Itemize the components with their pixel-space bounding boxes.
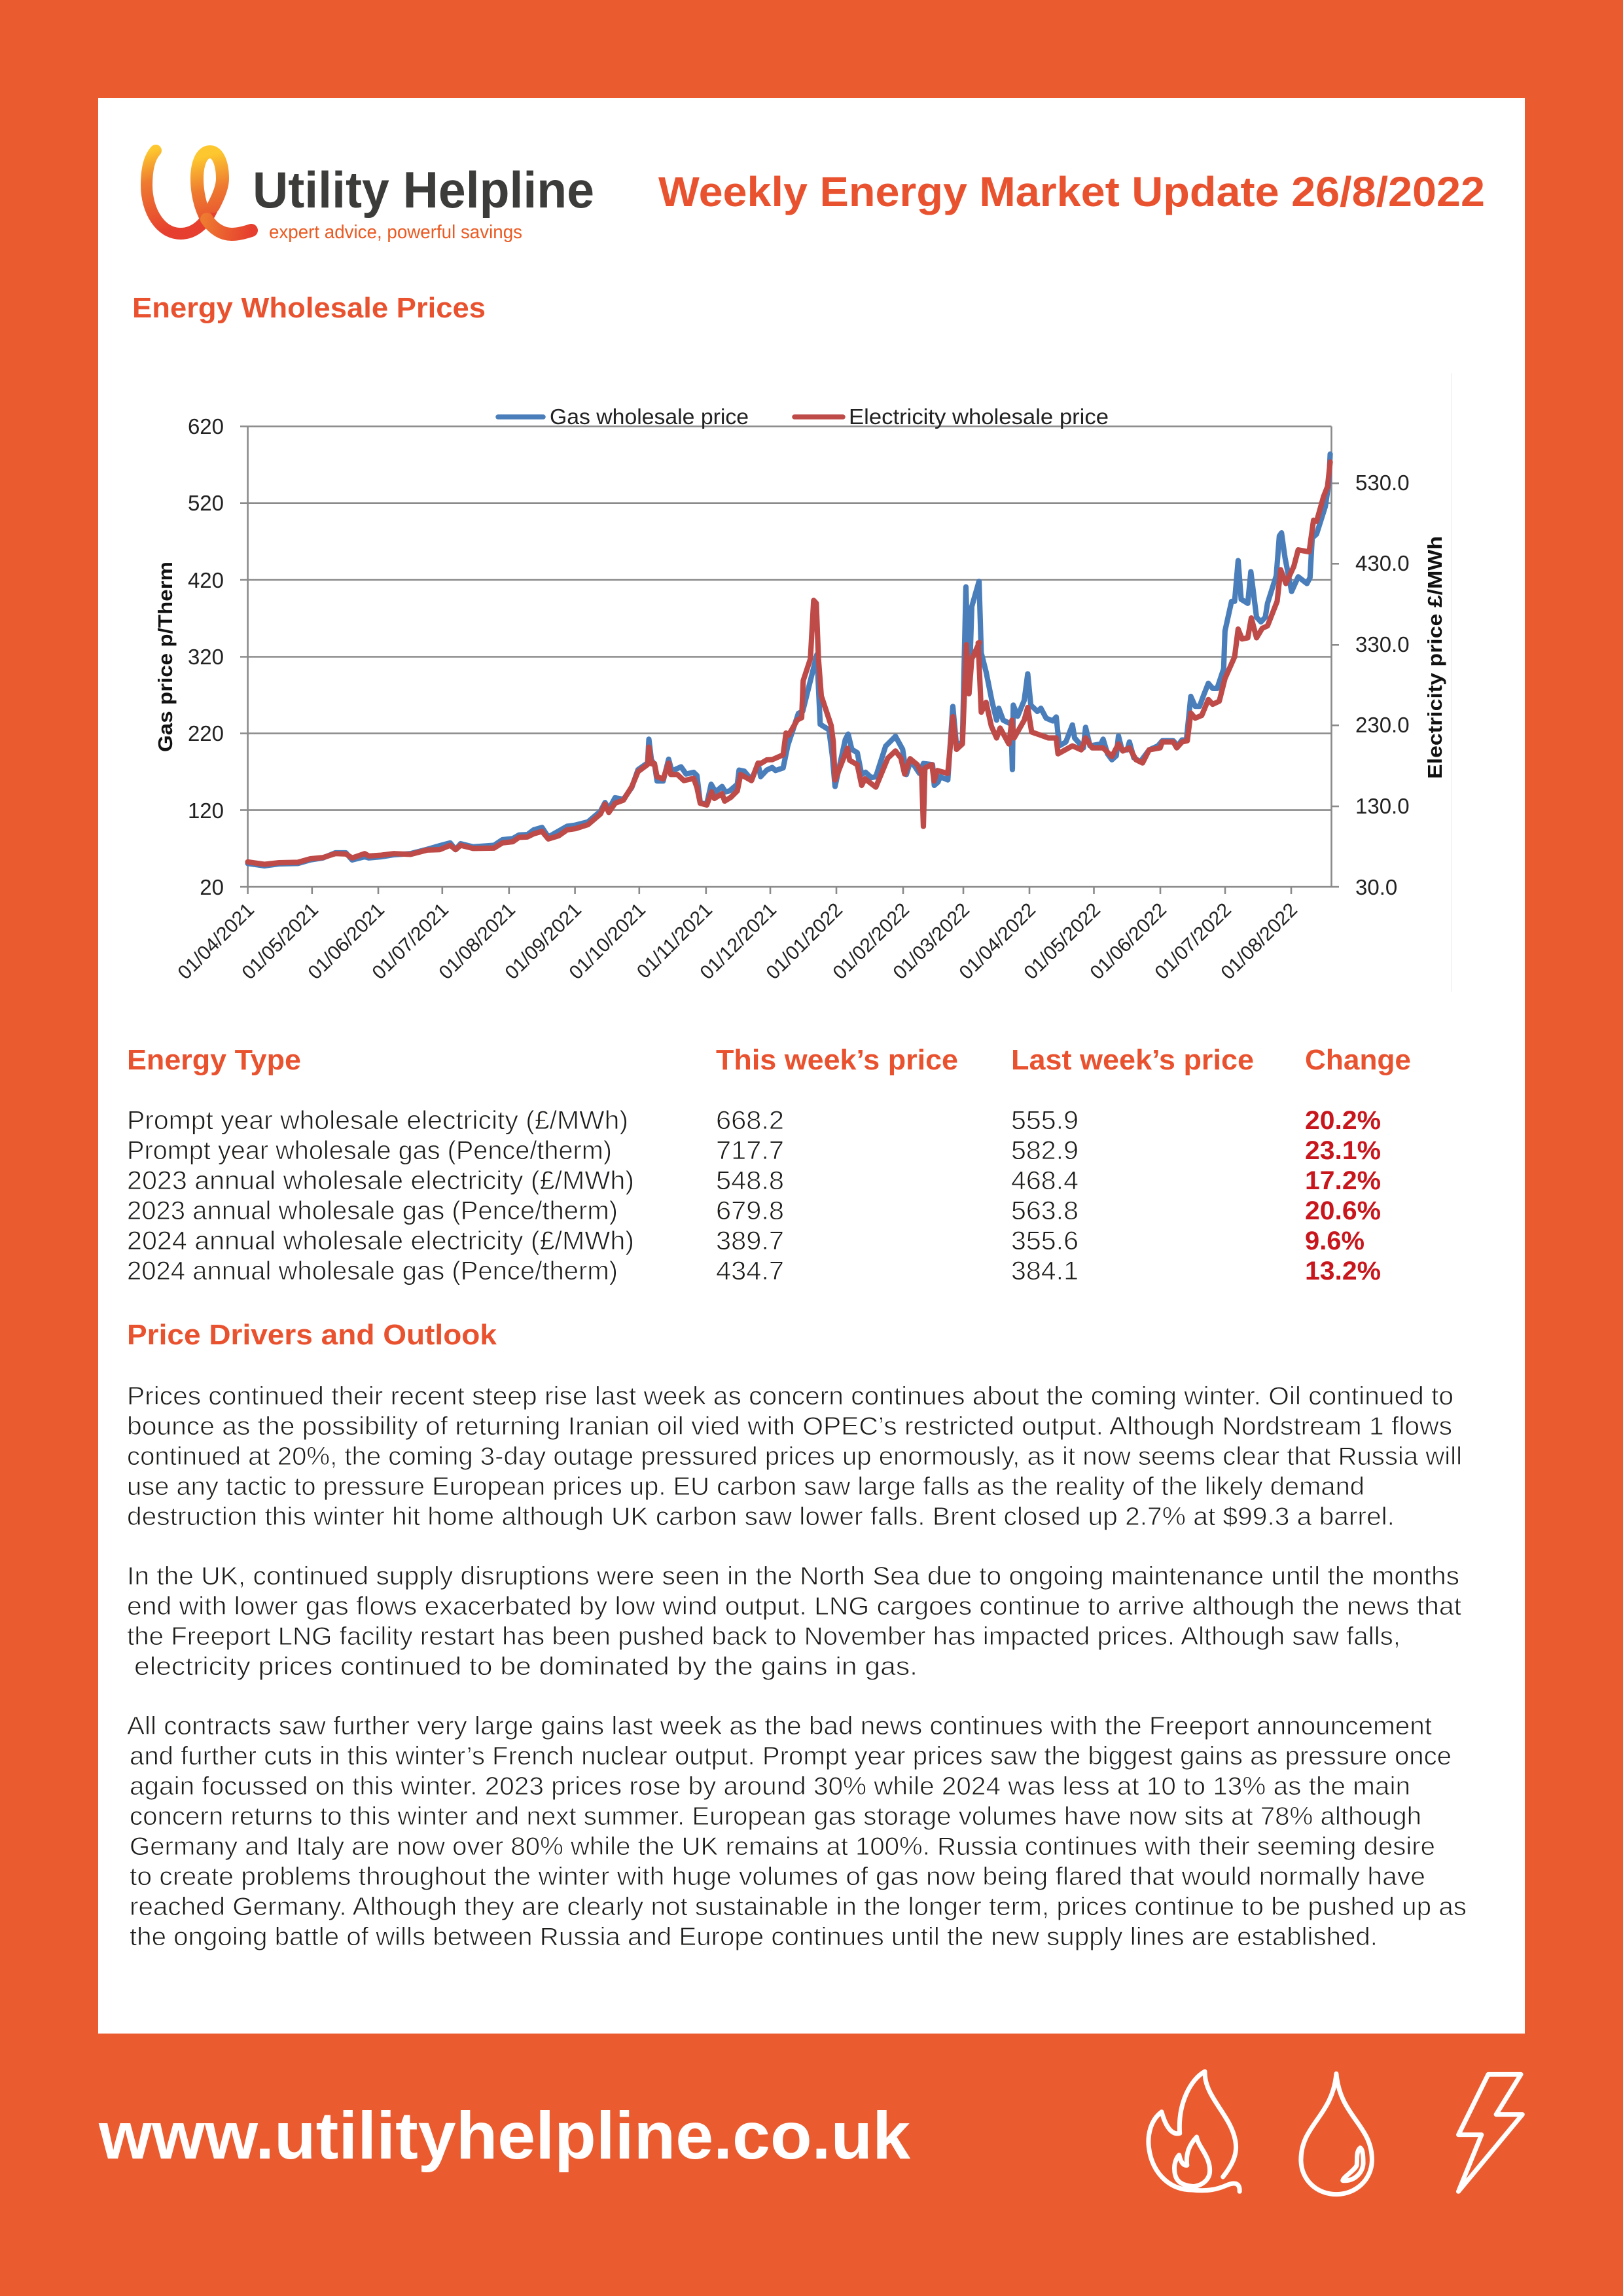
left axis labels: 620 bbox=[188, 414, 224, 439]
date axis labels: 01/06/2022 bbox=[1086, 899, 1171, 984]
left axis labels: 520 bbox=[188, 491, 224, 515]
row: prompt electricity: 20.2% bbox=[1305, 1106, 1381, 1135]
chart grid and axes bbox=[240, 427, 1339, 894]
white content panel bbox=[98, 98, 1525, 2034]
left axis labels: 420 bbox=[188, 568, 224, 592]
right axis labels: 130.0 bbox=[1355, 794, 1410, 818]
row: prompt electricity: 555.9 bbox=[1011, 1106, 1079, 1135]
left axis labels: 220 bbox=[188, 721, 224, 745]
heading: Energy Wholesale Prices: Energy Wholesale Prices bbox=[132, 292, 486, 324]
logo strapline: expert advice, powerful savings bbox=[269, 222, 522, 243]
paragraph 2: end with lower gas flows exacerbated by low wind output. LNG cargoes continue to arrive although the news that bbox=[127, 1592, 1461, 1621]
footer website address: www.utilityhelpline.co.uk bbox=[98, 2098, 910, 2173]
paragraph 2: the Freeport LNG facility restart has been pushed back to November has impacted prices. Although saw falls, bbox=[127, 1623, 1400, 1651]
paragraph 1: continued at 20%, the coming 3-day outage pressured prices up enormously, as it now seems clear that Russia will bbox=[127, 1443, 1462, 1471]
row: 2024 gas bbox=[127, 1257, 1381, 1285]
row: 2023 gas: 20.6% bbox=[1305, 1196, 1381, 1225]
icon: water drop bbox=[1301, 2073, 1372, 2195]
gas price line bbox=[248, 454, 1330, 866]
date axis labels: 01/07/2022 bbox=[1150, 899, 1236, 984]
date axis labels: 01/11/2021 bbox=[633, 899, 717, 983]
line chart: gas and electricity wholesale prices bbox=[154, 373, 1452, 992]
date axis labels: 01/08/2021 bbox=[435, 899, 520, 984]
date axis labels: 01/10/2021 bbox=[565, 899, 650, 984]
title: Weekly Energy Market Update 26/8/2022 bbox=[658, 168, 1485, 215]
date axis labels: 01/05/2021 bbox=[238, 899, 323, 984]
paragraph 3: Germany and Italy are now over 80% while the UK remains at 100%. Russia continues with their seeming desire bbox=[130, 1833, 1435, 1861]
chart legend: Electricity wholesale price bbox=[849, 404, 1109, 429]
paragraph 2: electricity prices continued to be dominated by the gains in gas. bbox=[134, 1653, 918, 1681]
right axis title: Electricity price £/MWh bbox=[1423, 536, 1446, 779]
logo: Utility Helpline bbox=[147, 151, 594, 243]
paragraph 3: All contracts saw further very large gains last week as the bad news continues with the Freeport announcement bbox=[127, 1712, 1432, 1740]
date axis labels: 01/06/2021 bbox=[304, 899, 389, 984]
row: prompt gas: 717.7 bbox=[716, 1136, 784, 1165]
row: 2023 electricity bbox=[127, 1166, 1381, 1195]
paragraph 1 bbox=[127, 1382, 1462, 1531]
paragraph 3: to create problems throughout the winter with huge volumes of gas now being flared that would normally have bbox=[130, 1863, 1425, 1891]
row: prompt electricity bbox=[127, 1106, 1381, 1135]
paragraph 2 bbox=[127, 1562, 1461, 1681]
paragraph 1: Prices continued their recent steep rise last week as concern continues about the coming winter. Oil continued to bbox=[127, 1382, 1454, 1410]
row: 2023 electricity: 17.2% bbox=[1305, 1166, 1381, 1195]
paragraph 2: In the UK, continued supply disruptions were seen in the North Sea due to ongoing maintenance until the months bbox=[127, 1562, 1459, 1590]
row: 2023 electricity: 548.8 bbox=[716, 1166, 784, 1195]
row: 2023 electricity: 468.4 bbox=[1011, 1166, 1079, 1195]
table header row: Change bbox=[1305, 1044, 1411, 1076]
right axis labels: 430.0 bbox=[1355, 551, 1410, 575]
table header row bbox=[127, 1044, 1411, 1076]
date axis labels: 01/12/2021 bbox=[696, 899, 781, 984]
row: 2024 electricity: 389.7 bbox=[716, 1227, 784, 1255]
row: 2024 electricity: 9.6% bbox=[1305, 1227, 1364, 1255]
date axis labels: 01/04/2021 bbox=[173, 899, 259, 984]
logo icon: looped ribbon bbox=[147, 151, 251, 234]
row: prompt gas: 582.9 bbox=[1011, 1136, 1079, 1165]
row: 2024 gas: 434.7 bbox=[716, 1257, 784, 1285]
paragraph 3: the ongoing battle of wills between Russia and Europe continues until the new supply lines are established. bbox=[130, 1923, 1378, 1951]
row: prompt gas: 23.1% bbox=[1305, 1136, 1381, 1165]
row: 2023 electricity: 2023 annual wholesale electricity (£/MWh) bbox=[127, 1166, 634, 1195]
row: 2024 gas: 13.2% bbox=[1305, 1257, 1381, 1285]
logo wordmark: Utility Helpline bbox=[253, 161, 594, 219]
heading: Price Drivers and Outlook: Price Drivers and Outlook bbox=[127, 1319, 497, 1351]
right axis labels: 530.0 bbox=[1355, 471, 1410, 495]
electricity price line bbox=[248, 462, 1330, 865]
paragraph 1: use any tactic to pressure European prices up. EU carbon saw large falls as the reality of the likely demand bbox=[127, 1473, 1364, 1501]
left axis labels bbox=[188, 414, 224, 899]
paragraph 3 bbox=[127, 1712, 1467, 1951]
chart legend: Gas wholesale price bbox=[550, 404, 749, 429]
paragraph 3: and further cuts in this winter’s French nuclear output. Prompt year prices saw the biggest gains as pressure once bbox=[130, 1742, 1452, 1770]
date axis labels: 01/04/2022 bbox=[955, 899, 1040, 984]
row: 2023 gas bbox=[127, 1196, 1381, 1225]
paragraph 3: concern returns to this winter and next summer. European gas storage volumes have now sits at 78% although bbox=[130, 1803, 1421, 1831]
row: prompt gas: Prompt year wholesale gas (Pence/therm) bbox=[127, 1136, 612, 1165]
date axis labels: 01/03/2022 bbox=[889, 899, 974, 984]
paragraph 1: destruction this winter hit home although UK carbon saw lower falls. Brent closed up 2.7% at $99.3 a barrel. bbox=[127, 1503, 1395, 1531]
chart legend bbox=[498, 404, 1109, 429]
right axis labels bbox=[1355, 471, 1410, 899]
table header row: Last week’s price bbox=[1011, 1044, 1254, 1076]
left axis labels: 320 bbox=[188, 645, 224, 669]
date axis labels: 01/01/2022 bbox=[762, 899, 847, 984]
paragraph 1: bounce as the possibility of returning Iranian oil vied with OPEC’s restricted output. Although Nordstream 1 flows bbox=[127, 1412, 1452, 1441]
row: 2024 gas: 384.1 bbox=[1011, 1257, 1079, 1285]
price table bbox=[127, 1044, 1411, 1285]
row: 2023 gas: 679.8 bbox=[716, 1196, 784, 1225]
date axis labels: 01/08/2022 bbox=[1217, 899, 1302, 984]
date axis labels bbox=[173, 899, 1302, 984]
left axis labels: 120 bbox=[188, 798, 224, 823]
row: prompt gas bbox=[127, 1136, 1381, 1165]
date axis labels: 01/02/2022 bbox=[829, 899, 914, 984]
paragraph 3: again focussed on this winter. 2023 prices rose by around 30% while 2024 was less at 10 to 13% as the main bbox=[130, 1772, 1410, 1801]
icon: flame bbox=[1149, 2072, 1240, 2191]
date axis labels: 01/07/2021 bbox=[368, 899, 453, 984]
right axis labels: 30.0 bbox=[1355, 875, 1397, 899]
row: prompt electricity: Prompt year wholesale electricity (£/MWh) bbox=[127, 1106, 628, 1135]
row: 2023 gas: 563.8 bbox=[1011, 1196, 1079, 1225]
left axis labels: 20 bbox=[200, 875, 224, 899]
row: 2024 electricity bbox=[127, 1227, 1364, 1255]
icon: lightning bolt bbox=[1459, 2074, 1522, 2191]
right axis labels: 330.0 bbox=[1355, 632, 1410, 656]
table header row: Energy Type bbox=[127, 1044, 301, 1076]
row: prompt electricity: 668.2 bbox=[716, 1106, 784, 1135]
left axis title: Gas price p/Therm bbox=[154, 562, 177, 752]
date axis labels: 01/05/2022 bbox=[1020, 899, 1105, 984]
paragraph 3: reached Germany. Although they are clearly not sustainable in the longer term, prices continue to be pushed up as bbox=[130, 1893, 1467, 1921]
date axis labels: 01/09/2021 bbox=[501, 899, 586, 984]
row: 2024 gas: 2024 annual wholesale gas (Pence/therm) bbox=[127, 1257, 618, 1285]
right axis labels: 230.0 bbox=[1355, 713, 1410, 737]
table header row: This week’s price bbox=[716, 1044, 958, 1076]
row: 2024 electricity: 2024 annual wholesale electricity (£/MWh) bbox=[127, 1227, 634, 1255]
row: 2024 electricity: 355.6 bbox=[1011, 1227, 1079, 1255]
row: 2023 gas: 2023 annual wholesale gas (Pence/therm) bbox=[127, 1196, 618, 1225]
